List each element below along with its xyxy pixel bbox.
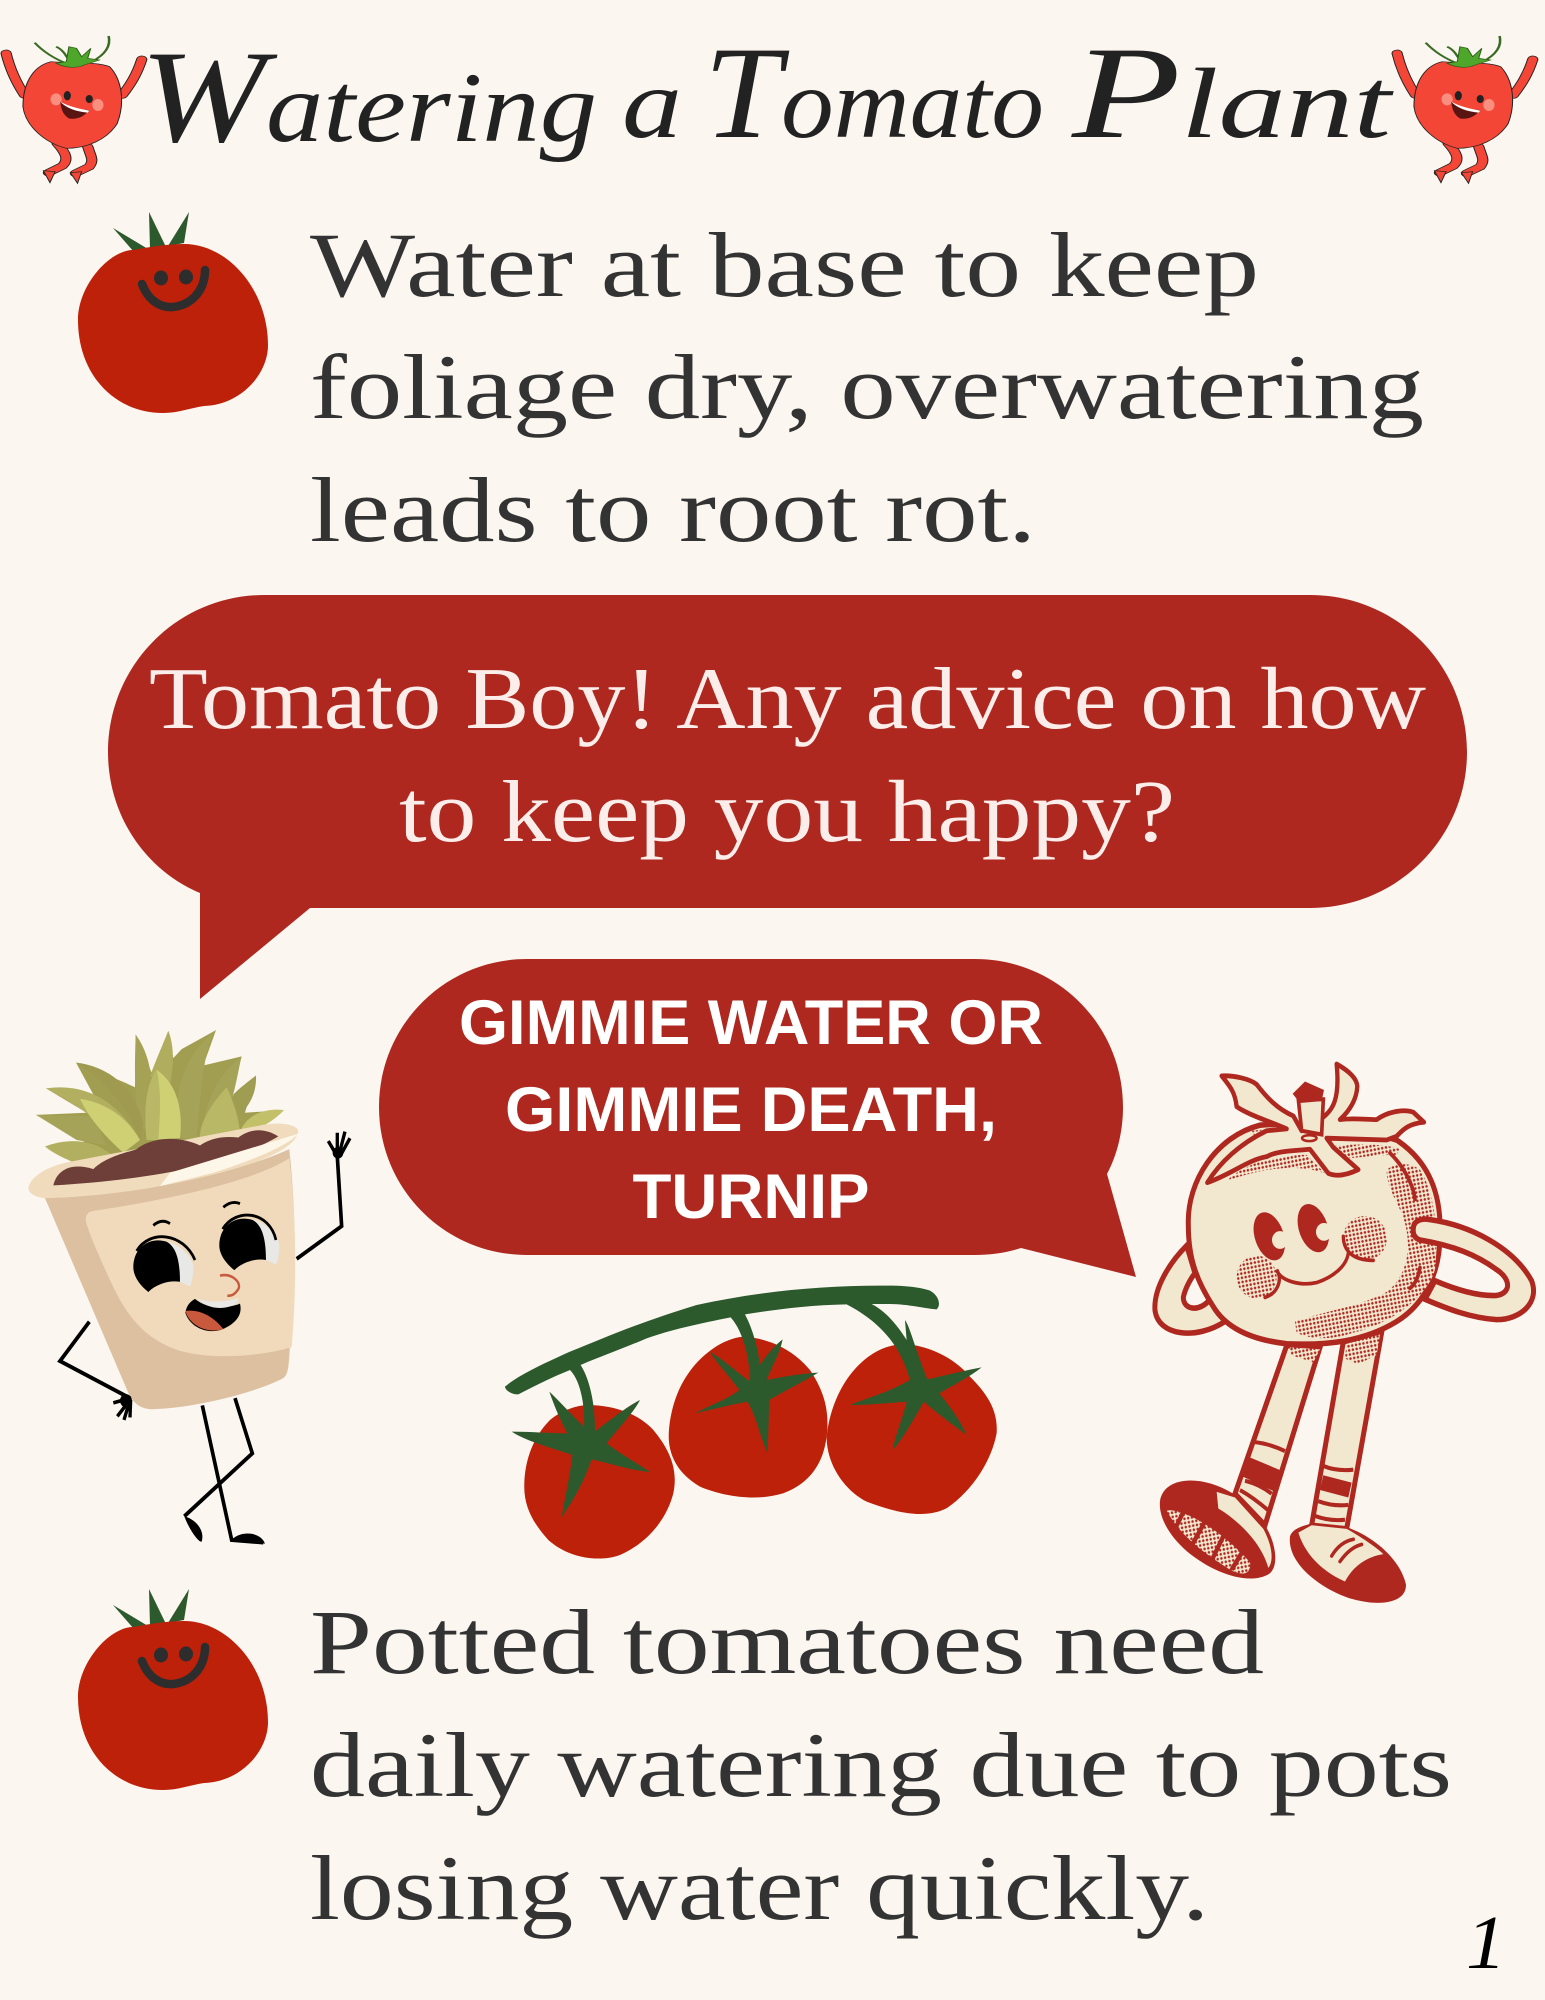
pot face panel [86, 1158, 295, 1356]
speech bubble: answer: GIMMIE DEATH, [505, 1075, 997, 1145]
speech bubble: question: to keep you happy? [399, 764, 1175, 861]
left shoe [1160, 1481, 1275, 1579]
title: a [622, 48, 682, 159]
text block: water at base: leads to root rot. [310, 459, 1036, 561]
icon: left cheering tomato mascot [6, 36, 142, 183]
title: Tomato [704, 19, 1044, 166]
mouth [185, 1298, 241, 1331]
speech bubble: question [108, 595, 1467, 999]
legs [1235, 1333, 1382, 1529]
right arm [1413, 1219, 1534, 1320]
feet [120, 1147, 343, 1544]
leg shading [1290, 1334, 1380, 1364]
eyes [1248, 1199, 1335, 1266]
icon: smiling tomato bullet top [78, 212, 268, 413]
illustration: tomato vine [505, 1286, 997, 1559]
text block: water at base: foliage dry, overwatering [310, 336, 1424, 438]
text block: potted tomatoes: daily watering due to pots [310, 1714, 1452, 1816]
stick limbs [60, 1132, 350, 1542]
title: P lant [1071, 19, 1394, 166]
soil [53, 1130, 278, 1185]
calyx [1207, 1064, 1424, 1183]
speech bubble: answer [379, 959, 1136, 1277]
left eye [133, 1221, 195, 1292]
title: Watering [140, 23, 597, 170]
tomato body [1188, 1124, 1440, 1344]
title [140, 19, 1394, 170]
character: potted plant [28, 1030, 350, 1544]
speech bubble: answer: GIMMIE WATER OR [459, 988, 1043, 1058]
page number: 1 [1466, 1901, 1506, 1985]
halftone shading [1227, 1129, 1436, 1338]
icon: smiling tomato bullet bottom [78, 1589, 268, 1790]
rim highlight [160, 1134, 298, 1186]
pot rim [28, 1124, 298, 1198]
speech bubble: answer: TURNIP [632, 1162, 870, 1232]
body highlights [1390, 1153, 1420, 1288]
right shoe [1290, 1523, 1406, 1603]
text block: water at base: Water at base to keep [310, 214, 1259, 316]
right eye [219, 1202, 279, 1270]
pot body [45, 1149, 295, 1409]
smile [1265, 1236, 1373, 1297]
nose [220, 1275, 239, 1296]
icon: right cheering tomato mascot [1397, 36, 1533, 183]
speech bubble: question: Tomato Boy! Any advice on how [149, 651, 1426, 748]
text block: potted tomatoes [310, 1591, 1452, 1939]
stem [1293, 1081, 1324, 1141]
text block: potted tomatoes: losing water quickly. [310, 1837, 1209, 1939]
stem and calyxes [505, 1286, 982, 1517]
plant leaves [36, 1030, 284, 1171]
text block: potted tomatoes: Potted tomatoes need [310, 1591, 1264, 1693]
left arm [1155, 1246, 1225, 1333]
sock stripes [1240, 1442, 1353, 1520]
text block: water at base [310, 214, 1424, 561]
character: retro tomato boy [1155, 1064, 1534, 1603]
tomatoes [524, 1337, 997, 1559]
